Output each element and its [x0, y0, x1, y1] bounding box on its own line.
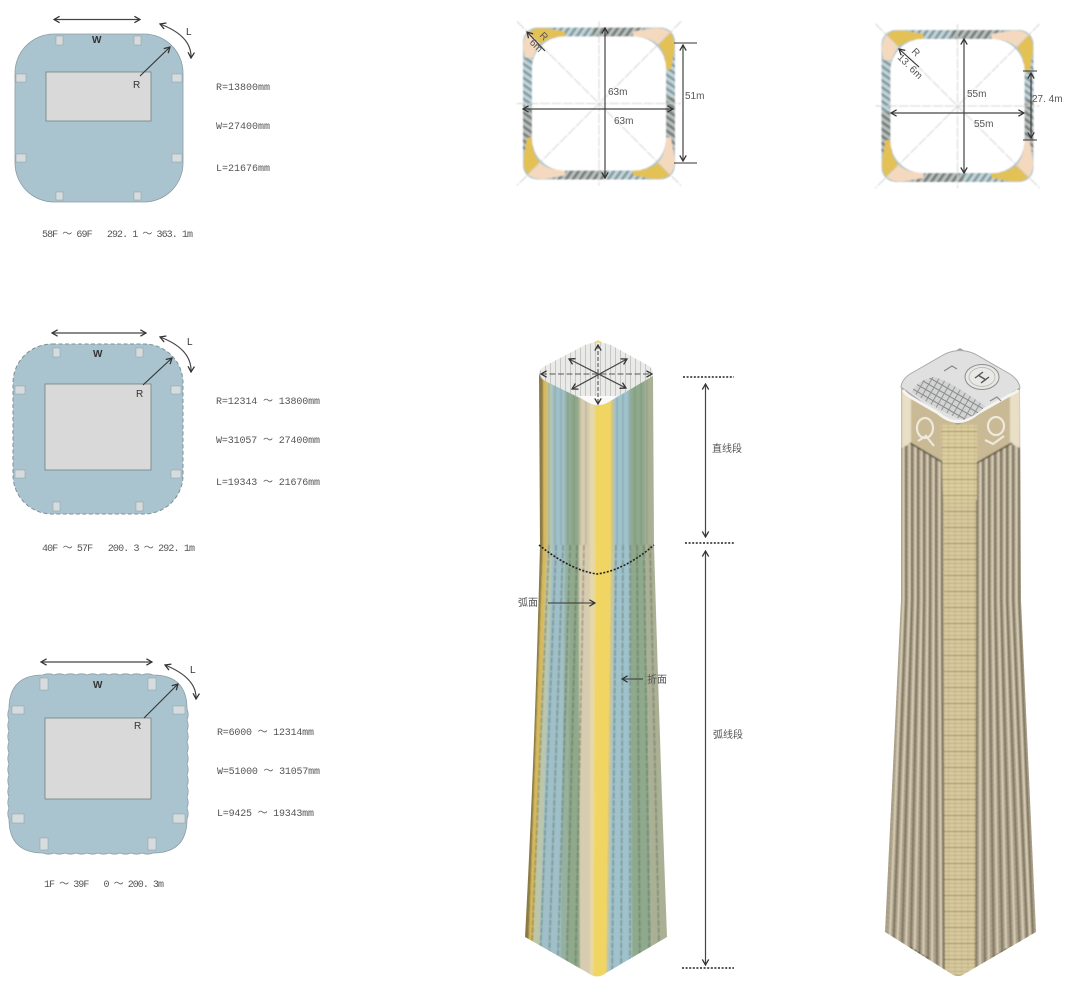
plan labels: W [93, 680, 103, 691]
curved segment dimension: 弧线段 [713, 728, 743, 741]
section labels [527, 30, 704, 127]
section labels: R [909, 46, 922, 59]
floor range caption: 1F ～ 39F 0 ～ 200. 3m [44, 880, 164, 891]
plan labels: L [186, 27, 192, 38]
plan dimensions text: W=31057 ～ 27400mm [216, 436, 320, 447]
plan dimensions text: R=13800mm [216, 83, 270, 94]
section labels [895, 46, 1063, 130]
radius arrow [527, 32, 545, 51]
plan shape: middle zone [13, 344, 183, 514]
plan labels: L [187, 337, 193, 348]
radius arrow [899, 49, 919, 67]
panel: section diagram 63m [517, 22, 704, 186]
tower body stripes [520, 340, 670, 990]
section labels: 55m [967, 89, 986, 100]
facade grids [944, 504, 945, 600]
roof with diagonal arrows [539, 342, 653, 405]
horizontal width arrow [891, 112, 1024, 114]
arc face callout [518, 596, 595, 609]
plan dimensions text: W=51000 ～ 31057mm [217, 767, 320, 778]
section labels: 51m [685, 91, 704, 102]
dark ribs on faces [892, 440, 1035, 985]
roof plate [901, 350, 1020, 422]
plan shape: top zone [15, 34, 183, 202]
side length dimension [1023, 71, 1037, 140]
lower facade lines [530, 545, 660, 990]
plan dimensions text [217, 728, 320, 820]
panel: floor plan 40F to 57F [13, 333, 320, 555]
section labels: 13. 6m [895, 52, 924, 82]
dimension L arc arrow [160, 337, 191, 372]
arc face callout: 弧面 [518, 596, 538, 609]
plan shape: lower zone with scalloped edge [8, 674, 188, 854]
ring with corner petals [876, 24, 1040, 188]
parapet edge [903, 390, 1018, 422]
panel: floor plan 1F to 39F [8, 662, 320, 891]
folded face callout: 折面 [647, 673, 667, 686]
plan labels: R [136, 389, 143, 400]
plan dimensions text: W=27400mm [216, 122, 270, 133]
plan dimensions text [216, 83, 270, 175]
plan labels [93, 337, 193, 400]
section labels: R [537, 30, 550, 43]
section labels: 6m [527, 37, 544, 55]
section labels: 55m [974, 119, 993, 130]
folded face callout [622, 673, 667, 686]
plan dimensions text [216, 397, 320, 489]
dimension W arrow [41, 661, 152, 663]
vertical width arrow [604, 28, 606, 178]
section labels: 63m [614, 116, 633, 127]
plan labels [92, 27, 192, 91]
straight segment dimension: 直线段 [712, 442, 742, 455]
radius R arrow [140, 47, 170, 76]
foot shading [910, 948, 1008, 961]
ring with corner petals [517, 22, 681, 186]
panel: floor plan 58F to 69F [15, 20, 270, 241]
section labels: 27. 4m [1032, 94, 1063, 105]
side length dimension [674, 43, 697, 163]
plan labels: W [92, 35, 102, 46]
plan dimensions text: L=19343 ～ 21676mm [216, 478, 320, 489]
floor range caption: 58F ～ 69F 292. 1 ～ 363. 1m [42, 230, 193, 241]
section labels: 63m [608, 87, 627, 98]
floor range caption: 40F ～ 57F 200. 3 ～ 292. 1m [42, 544, 195, 555]
dimension L arc arrow [165, 665, 196, 699]
dotted transition curve [539, 545, 654, 574]
radius R arrow [144, 684, 178, 718]
plan dimensions text: L=9425 ～ 19343mm [217, 809, 314, 820]
horizontal width arrow [523, 108, 673, 110]
centre corner panel [942, 500, 977, 976]
dimension L arc arrow [160, 24, 191, 58]
plan labels: W [93, 349, 103, 360]
plan dimensions text: R=12314 ～ 13800mm [216, 397, 320, 408]
radius R arrow [143, 358, 172, 385]
plan labels: R [133, 80, 140, 91]
plan labels: R [134, 721, 141, 732]
vertical width arrow [963, 39, 965, 173]
plan dimensions text: R=6000 ～ 12314mm [217, 728, 314, 739]
panel: section diagram 55m [876, 24, 1063, 188]
logo right [985, 417, 1004, 444]
helipad [965, 364, 999, 390]
plan dimensions text: L=21676mm [216, 164, 270, 175]
dimension W arrow [54, 18, 140, 20]
tower body [880, 340, 1041, 990]
plan labels: L [190, 665, 196, 676]
plan labels [93, 665, 196, 732]
logo left [917, 418, 934, 446]
panel: coloured tower geometry [518, 340, 743, 990]
roof corner brackets [944, 366, 1001, 401]
dome grid skylight [912, 377, 985, 420]
dimension W arrow [52, 332, 146, 334]
upper facade lines [549, 375, 647, 545]
crown panels [901, 385, 958, 462]
light ribs on faces [888, 440, 1032, 985]
panel: rendered tower facade [880, 340, 1041, 990]
